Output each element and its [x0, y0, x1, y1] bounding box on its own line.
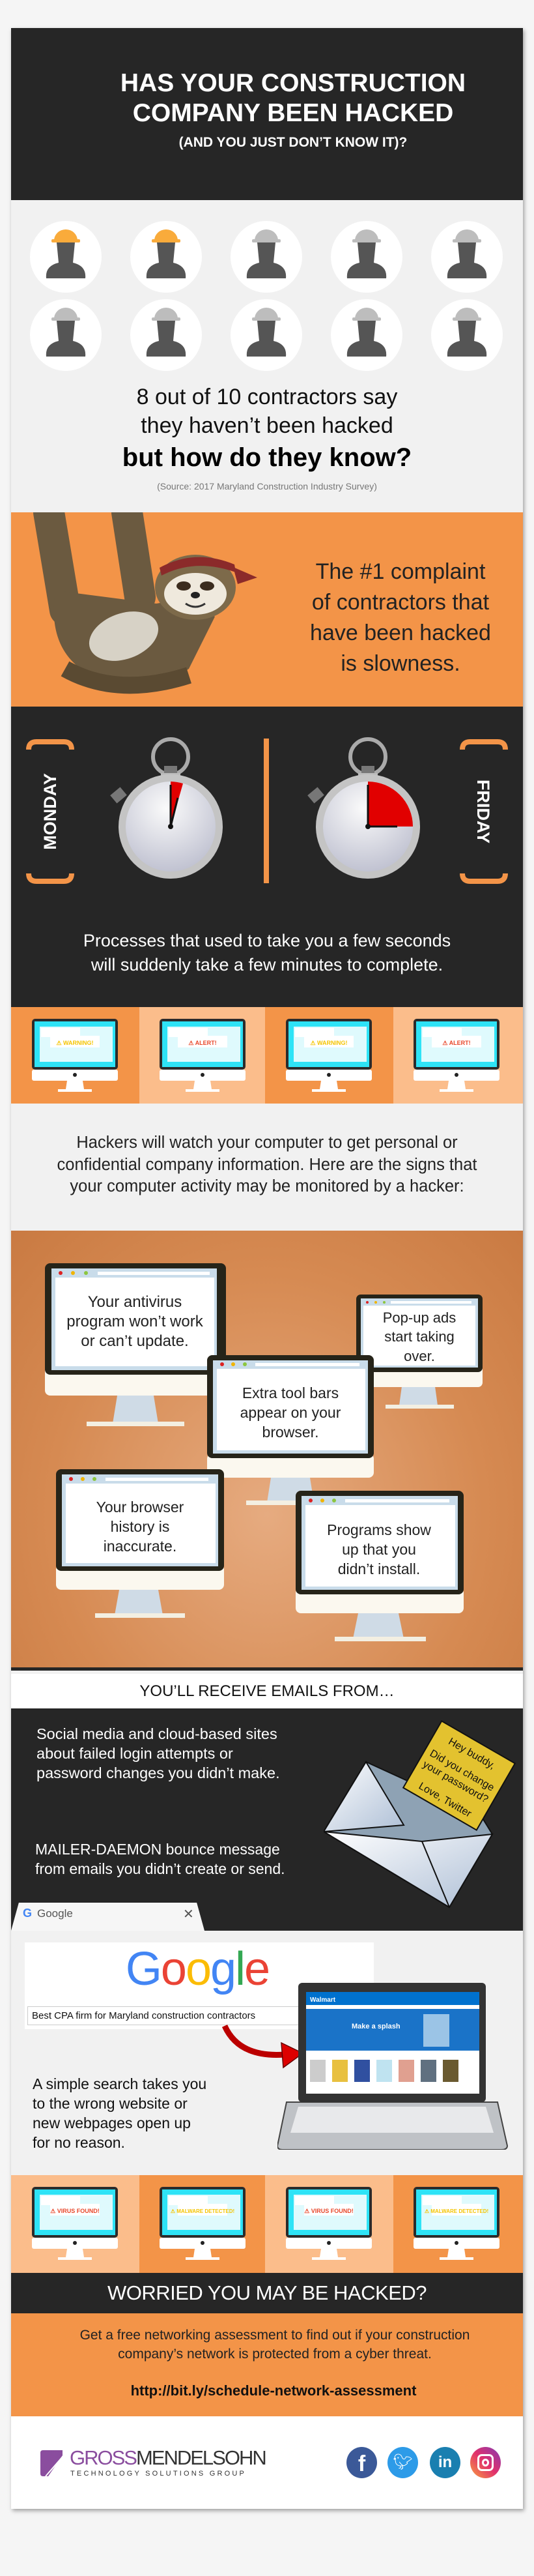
icon: facebook — [346, 2447, 377, 2478]
strip: warning monitors — [11, 1007, 523, 1104]
intro text: hackers: your computer activity may be monitored by a hacker: — [70, 1177, 464, 1195]
text: simple search: new webpages open up — [33, 2115, 191, 2131]
arrow — [221, 2025, 298, 2069]
text: simple search: to the wrong website or — [33, 2095, 188, 2112]
intro text: hackers — [57, 1134, 477, 1195]
monitor: warning — [32, 1019, 118, 1092]
cta text: company’s network is protected from a cyber threat. — [118, 2347, 432, 2362]
text: mailer daemon — [35, 1841, 285, 1877]
illustration: laptop: Walmart — [310, 1997, 336, 2004]
icon grid: contractors — [30, 221, 503, 371]
monitor: virus found — [32, 2187, 118, 2260]
logo: gross mendelsohn — [40, 2446, 266, 2478]
slowness text: have been hacked — [310, 621, 491, 645]
monitor: pop-up ads: over. — [404, 1348, 435, 1364]
subtitle: (AND YOU JUST DON’T KNOW IT)? — [179, 135, 407, 150]
illustration: envelope with note: Did you change — [428, 1748, 496, 1794]
cta text: Get a free networking assessment to find out if your construction — [80, 2328, 470, 2343]
intro text: hackers: Hackers will watch your computer to get personal or — [76, 1134, 458, 1152]
monitor: alert: ⚠ ALERT! — [188, 1040, 217, 1046]
title: COMPANY BEEN HACKED — [133, 99, 453, 127]
google logo: Google — [126, 1943, 269, 1995]
monitor: alert — [414, 1019, 499, 1092]
processes text — [83, 931, 451, 974]
monitor: pop-up ads: Pop-up ads — [383, 1310, 456, 1326]
heading: worried: WORRIED YOU MAY BE HACKED? — [107, 2281, 427, 2304]
stat text: 8 out of 10 contractors say — [137, 385, 397, 409]
slowness text: of contractors that — [312, 590, 489, 615]
monitor: browser history: history is — [111, 1518, 169, 1535]
panel: call to action — [11, 2313, 523, 2416]
monitor: alert — [160, 1019, 246, 1092]
bracket: monday — [29, 742, 72, 881]
illustration: laptop — [277, 1983, 508, 2150]
monitor: programs — [296, 1491, 464, 1641]
stat text: they haven’t been hacked — [141, 413, 393, 438]
illustration: sloth — [33, 512, 257, 694]
heading: emails: YOU’LL RECEIVE EMAILS FROM… — [139, 1682, 395, 1700]
text: simple search: A simple search takes you — [33, 2075, 206, 2092]
illustration: envelope with note: Hey buddy, — [446, 1736, 497, 1772]
search field — [27, 2006, 307, 2025]
url: http://bit.ly/schedule-network-assessment — [131, 2382, 416, 2399]
monitor: pop-up ads: start taking — [384, 1328, 455, 1345]
illustration: envelope with note: Love, Twitter — [417, 1781, 473, 1820]
monitor: malware detected: ⚠ MALWARE DETECTED! — [171, 2208, 234, 2214]
browser tab: google: G — [23, 1907, 32, 1920]
processes text: will suddenly take a few minutes to complete. — [91, 955, 443, 974]
footer — [11, 2416, 523, 2509]
text: mailer daemon: from emails you didn’t create or send. — [35, 1860, 285, 1877]
monitor: extra toolbars: Extra tool bars — [242, 1384, 339, 1401]
header panel — [11, 28, 523, 200]
icon: instagram — [470, 2447, 501, 2478]
monitor: programs: didn’t install. — [338, 1560, 420, 1577]
logo: gross mendelsohn: GROSSMENDELSOHN — [70, 2446, 266, 2469]
social icons — [346, 2447, 501, 2478]
title: HAS YOUR CONSTRUCTION — [120, 69, 466, 97]
logo: gross mendelsohn: TECHNOLOGY SOLUTIONS GROUP — [70, 2470, 246, 2478]
monitor: programs: Programs show — [327, 1521, 431, 1538]
illustration: envelope with note — [324, 1720, 516, 1909]
source: (Source: 2017 Maryland Construction Industry Survey) — [157, 481, 377, 491]
monitor: warning — [286, 1019, 372, 1092]
text: simple search — [33, 2075, 206, 2151]
monitor: browser history: inaccurate. — [104, 1538, 176, 1555]
stopwatch: friday — [307, 739, 420, 879]
chart: monday vs friday stopwatches — [26, 737, 508, 884]
slowness text — [310, 559, 491, 676]
intro text: hackers: confidential company information. Here are the signs that — [57, 1155, 477, 1173]
bracket: friday — [462, 742, 505, 881]
illustration: envelope with note: your password? — [421, 1759, 490, 1806]
browser tab: google: Google — [37, 1907, 73, 1920]
icon: linkedin: in — [438, 2453, 452, 2471]
text: mailer daemon: MAILER-DAEMON bounce message — [35, 1841, 280, 1858]
monitor: browser history — [56, 1469, 224, 1618]
slowness text: The #1 complaint — [316, 559, 485, 584]
monitor: pop-up ads — [356, 1295, 483, 1409]
monitor: antivirus: program won’t work — [66, 1313, 204, 1330]
title — [120, 69, 466, 127]
strip: virus monitors — [11, 2175, 523, 2273]
icon: facebook: f — [358, 2452, 365, 2476]
monitor: antivirus: Your antivirus — [88, 1293, 182, 1311]
monitor: virus found: ⚠ VIRUS FOUND! — [304, 2208, 354, 2214]
monitor: warning: ⚠ WARNING! — [56, 1040, 94, 1046]
heading: worried — [11, 2273, 523, 2313]
monitor: malware detected — [414, 2187, 499, 2260]
stat text — [137, 385, 397, 438]
monitor: alert: ⚠ ALERT! — [442, 1040, 471, 1046]
monitor: antivirus — [45, 1263, 226, 1426]
google search box — [25, 1942, 374, 2029]
browser tab: google — [11, 1903, 204, 1931]
monitor: malware detected — [160, 2187, 246, 2260]
stopwatch: monday — [110, 739, 223, 879]
bracket: friday: FRIDAY — [473, 780, 493, 843]
slowness text: is slowness. — [341, 651, 460, 676]
monitor: malware detected: ⚠ MALWARE DETECTED! — [425, 2208, 488, 2214]
cta text — [80, 2328, 470, 2362]
monitor: extra toolbars: appear on your — [240, 1404, 341, 1421]
text: simple search: for no reason. — [33, 2134, 125, 2151]
icon: linkedin — [430, 2447, 460, 2478]
panel: signs monitors — [11, 1231, 523, 1671]
panel: emails — [11, 1708, 523, 1931]
monitor: virus found: ⚠ VIRUS FOUND! — [50, 2208, 100, 2214]
monitor: warning: ⚠ WARNING! — [310, 1040, 348, 1046]
monitor: virus found — [286, 2187, 372, 2260]
panel: stopwatches — [11, 707, 523, 1007]
illustration: laptop: Make a splash — [352, 2023, 400, 2030]
text: social media — [36, 1725, 280, 1781]
heading: emails — [11, 1674, 523, 1708]
divider — [264, 739, 269, 883]
panel: contractor stats — [11, 200, 523, 512]
monitor: antivirus: or can’t update. — [81, 1332, 189, 1350]
bracket: monday: MONDAY — [40, 773, 60, 850]
text: social media: Social media and cloud-based sites — [36, 1725, 277, 1742]
panel: wrong website — [11, 1931, 523, 2175]
text: social media: password changes you didn’t make. — [36, 1764, 280, 1781]
processes text: Processes that used to take you a few seconds — [83, 931, 451, 950]
question text: but how do they know? — [122, 443, 412, 472]
monitor: extra toolbars — [207, 1355, 374, 1505]
icon: twitter: 🐦︎ — [393, 2453, 413, 2471]
search field: Best CPA firm for Maryland construction contractors — [32, 2010, 255, 2021]
browser tab: google: ✕ — [183, 1907, 194, 1922]
panel: slowness — [11, 512, 523, 707]
text: social media: about failed login attempts or — [36, 1745, 233, 1762]
monitor: browser history: Your browser — [96, 1499, 184, 1515]
icon: twitter — [387, 2447, 418, 2478]
monitor: extra toolbars: browser. — [262, 1424, 318, 1441]
monitor: programs: up that you — [342, 1541, 416, 1558]
